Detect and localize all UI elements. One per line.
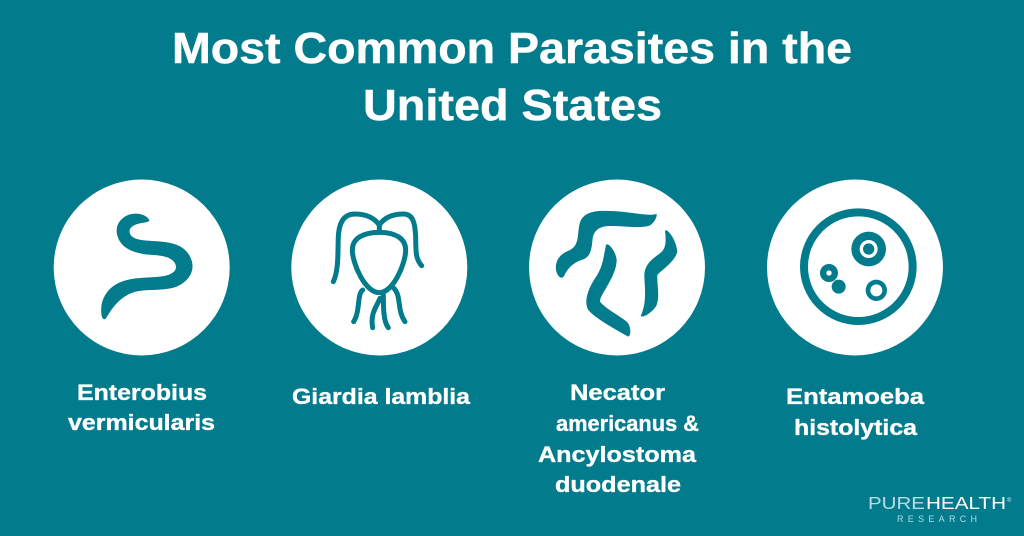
- icon circle: Entamoeba: [767, 180, 943, 356]
- panel: Necator americanus and Ancylostoma duodenale: [529, 180, 705, 497]
- label: Necator americanus and Ancylostoma duodenale: duodenale: [555, 472, 681, 497]
- icon: single worm: [101, 214, 193, 319]
- icon circle: hookworms: [529, 180, 705, 356]
- label: Entamoeba histolytica: histolytica: [794, 415, 918, 440]
- icon circle: Giardia: [291, 180, 467, 356]
- logo: PureHealth Research: [868, 493, 1012, 524]
- title: Most Common Parasites in the: [172, 24, 852, 73]
- panel: Enterobius vermicularis: [54, 180, 230, 435]
- label: Necator americanus and Ancylostoma duodenale: Ancylostoma: [538, 442, 697, 467]
- title: [172, 24, 852, 130]
- label: Enterobius vermicularis: Enterobius: [77, 380, 207, 405]
- label: Enterobius vermicularis: vermicularis: [68, 410, 215, 435]
- label: Necator americanus and Ancylostoma duodenale: americanus &: [556, 411, 699, 436]
- label: Entamoeba histolytica: [786, 384, 925, 440]
- icon: amoeba cell: [804, 212, 913, 321]
- label: Entamoeba histolytica: Entamoeba: [786, 384, 925, 409]
- logo: PureHealth Research: PURE: [868, 493, 925, 513]
- label: Enterobius vermicularis: [68, 380, 215, 435]
- icon circle: Enterobius: [54, 180, 230, 356]
- icon: flagellated protozoan: [333, 214, 422, 328]
- logo: PureHealth Research: RESEARCH: [897, 514, 977, 524]
- panel: Giardia lamblia: [291, 180, 471, 409]
- label: Necator americanus and Ancylostoma duodenale: [538, 380, 699, 497]
- logo: PureHealth Research: ®: [1007, 497, 1012, 504]
- label: Necator americanus and Ancylostoma duodenale: Necator: [570, 380, 666, 405]
- title: United States: [363, 81, 662, 130]
- panel: Entamoeba histolytica: [767, 180, 943, 440]
- logo: PureHealth Research: HEALTH: [926, 493, 1006, 513]
- icon: three worms: [556, 211, 677, 337]
- label: Giardia lamblia: Giardia lamblia: [292, 384, 471, 409]
